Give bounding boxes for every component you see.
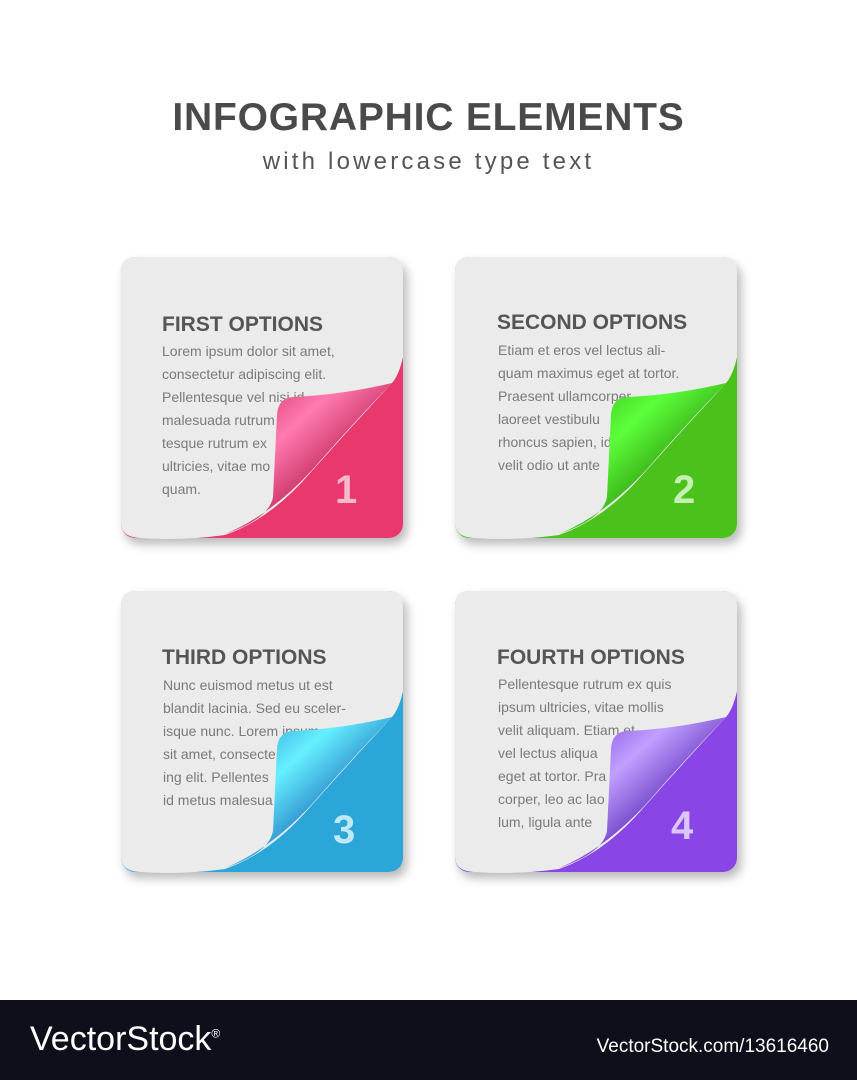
card 1 — [121, 257, 403, 539]
card 2: Praesent ullamcorper — [498, 388, 631, 404]
card 3: id metus malesua — [163, 792, 273, 808]
card 2: velit odio ut ante — [498, 457, 600, 473]
card 2: SECOND OPTIONS — [497, 311, 687, 334]
card 4: lum, ligula ante — [498, 814, 592, 830]
card 1: FIRST OPTIONS — [162, 313, 323, 336]
card 3: 3 — [333, 808, 355, 852]
card 2: laoreet vestibulu — [498, 411, 600, 427]
card 4: vel lectus aliqua — [498, 745, 598, 761]
footer bar — [0, 1000, 857, 1080]
card 3: isque nunc. Lorem ipsum — [163, 723, 319, 739]
card 4: ipsum ultricies, vitae mollis — [498, 699, 664, 715]
card 4: eget at tortor. Pra — [498, 768, 606, 784]
subtitle: with lowercase type text — [263, 148, 594, 175]
card 4: 4 — [671, 804, 694, 848]
card 1: malesuada rutrum — [162, 412, 275, 428]
card 3: ing elit. Pellentes — [163, 769, 269, 785]
card 2 — [455, 257, 737, 539]
card 4: corper, leo ac lao — [498, 791, 605, 807]
card 4 — [455, 591, 737, 873]
footer url: VectorStock.com/13616460 — [597, 1036, 829, 1057]
card 3: THIRD OPTIONS — [162, 646, 327, 669]
card 1: consectetur adipiscing elit. — [162, 366, 326, 382]
card 3: blandit lacinia. Sed eu sceler- — [163, 700, 346, 716]
footer logo: VectorStock® — [30, 1020, 220, 1058]
title: INFOGRAPHIC ELEMENTS — [172, 96, 685, 139]
card 3: sit amet, consecte — [163, 746, 276, 762]
card 4: Pellentesque rutrum ex quis — [498, 676, 672, 692]
card 1: Lorem ipsum dolor sit amet, — [162, 343, 335, 359]
card 1: ultricies, vitae mo — [162, 458, 270, 474]
card 2: rhoncus sapien, id — [498, 434, 612, 450]
card 1: tesque rutrum ex — [162, 435, 267, 451]
card 3 — [121, 591, 403, 873]
card 1: quam. — [162, 481, 201, 497]
card 2: quam maximus eget at tortor. — [498, 365, 679, 381]
card 2: 2 — [673, 468, 695, 512]
card 4: FOURTH OPTIONS — [497, 646, 685, 669]
card 1: Pellentesque vel nisi id — [162, 389, 304, 405]
card 3: Nunc euismod metus ut est — [163, 677, 333, 693]
card 1: 1 — [335, 468, 357, 512]
card 2: Etiam et eros vel lectus ali- — [498, 342, 666, 358]
card 4: velit aliquam. Etiam et — [498, 722, 635, 738]
